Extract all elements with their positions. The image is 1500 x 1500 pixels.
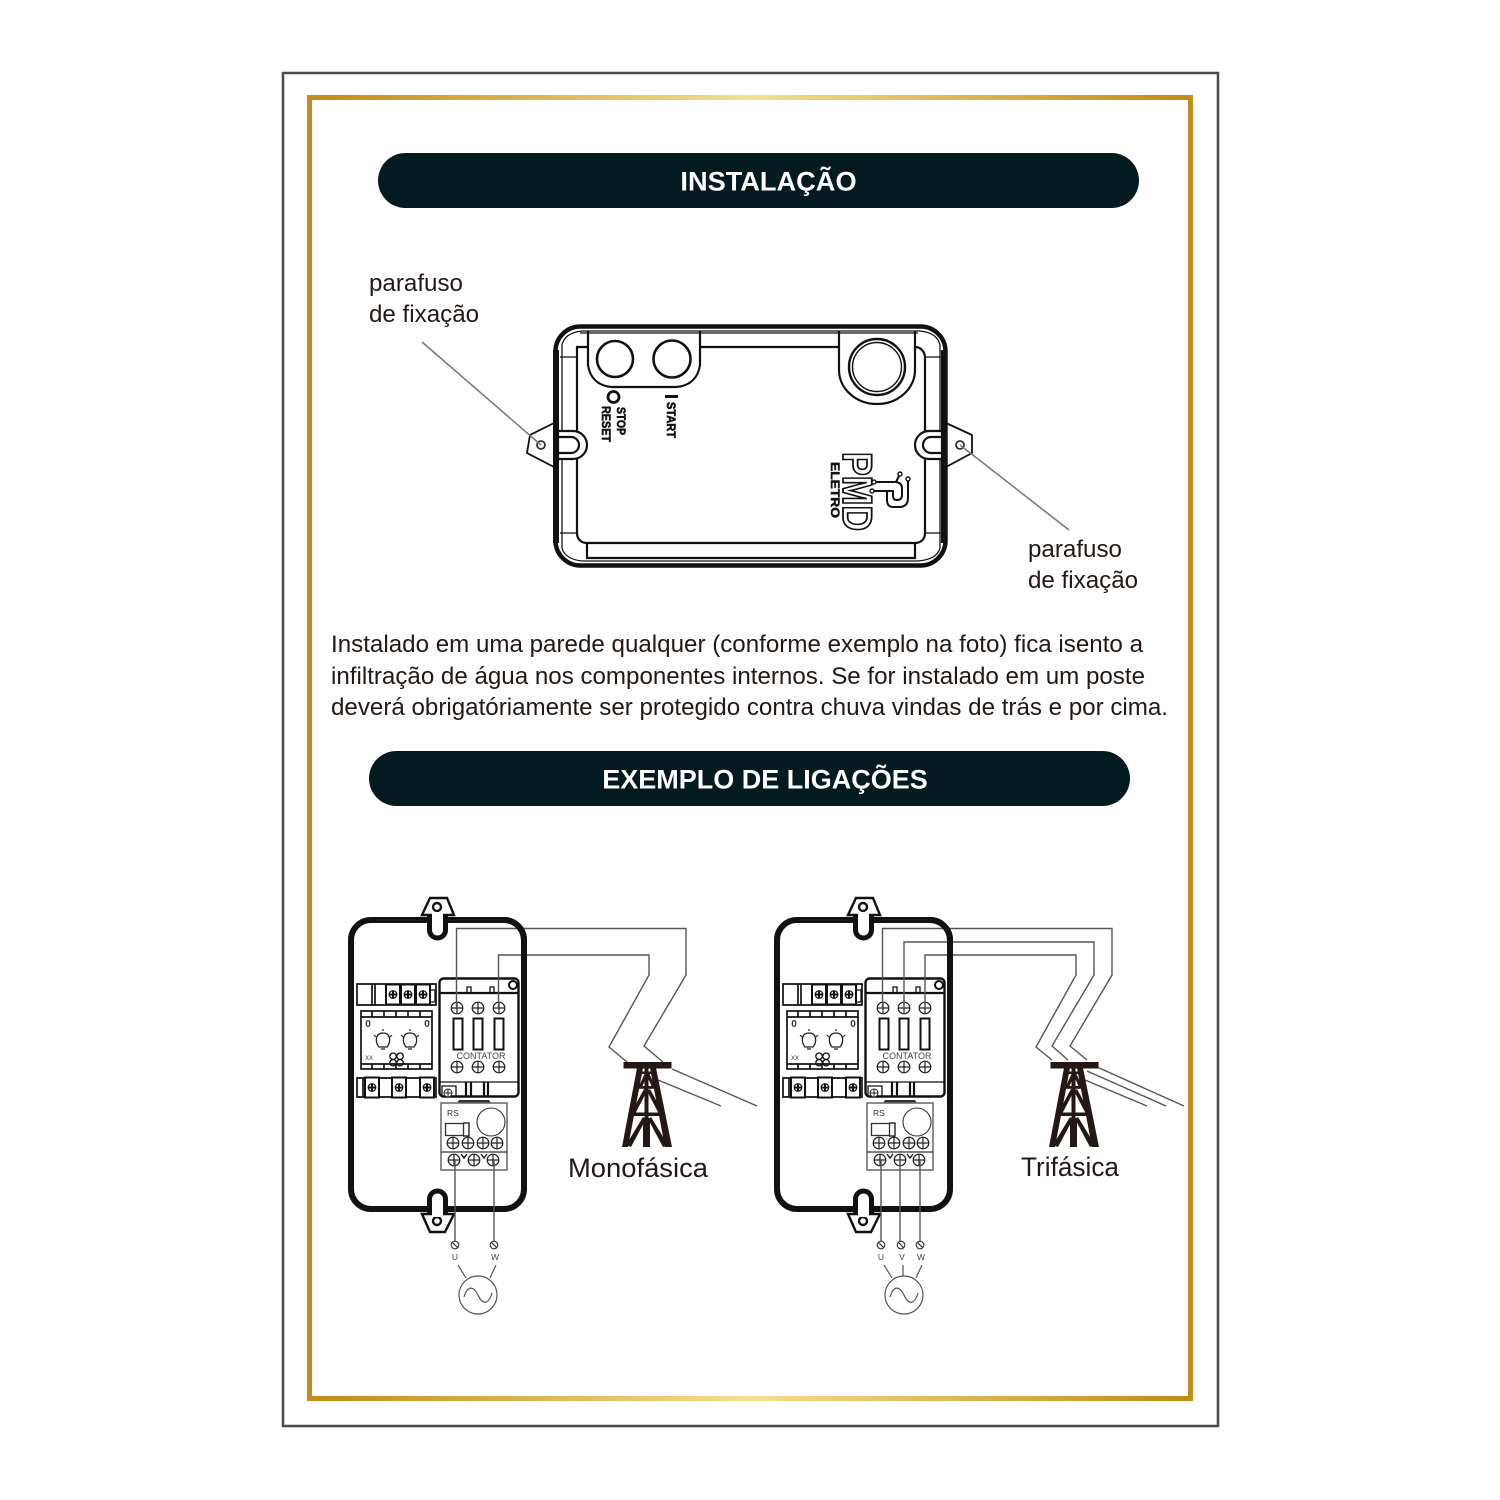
terminals and generator xyxy=(877,1241,925,1314)
leader line right xyxy=(960,445,1069,530)
device drawing: enclosure top view xyxy=(527,326,972,566)
logo pmd eletro: PMD xyxy=(834,452,881,531)
paragraph: deverá obrigatóriamente ser protegido contra chuva vindas de trás e por cima. xyxy=(331,694,1168,721)
start mark xyxy=(665,395,678,398)
mounting tab right xyxy=(946,423,972,467)
relay module: 0 xyxy=(791,1019,797,1030)
diagram: trifásica xyxy=(777,898,1184,1314)
relay module: XX xyxy=(791,1056,799,1062)
enclosure body xyxy=(553,326,947,566)
label: parafuso de fixação left: de fixação xyxy=(369,301,479,328)
tower xyxy=(1049,1062,1099,1147)
indicator led xyxy=(608,392,619,402)
mounting tab left xyxy=(527,423,554,467)
thermal relay xyxy=(441,1100,507,1170)
logo pmd eletro xyxy=(828,452,910,531)
terminals and generator: V xyxy=(899,1252,905,1262)
terminals and generator: W xyxy=(917,1252,925,1262)
heading: exemplo de ligações: EXEMPLO DE LIGAÇÕES xyxy=(602,764,928,794)
label: parafuso de fixação right: de fixação xyxy=(1028,567,1138,594)
fixing slot left xyxy=(558,431,587,459)
relay module xyxy=(783,984,862,1098)
text stop: STOP xyxy=(614,407,628,435)
logo pmd eletro: ELETRO xyxy=(828,462,842,518)
contactor: CONTATOR xyxy=(456,1051,506,1061)
label trifásica: Trifásica xyxy=(1021,1152,1120,1182)
relay module: 0 xyxy=(850,1019,856,1030)
button start xyxy=(654,340,690,378)
thermal relay: RS xyxy=(447,1108,459,1118)
cable gland xyxy=(839,331,915,404)
terminals and generator xyxy=(451,1241,499,1314)
terminals and generator: U xyxy=(878,1252,884,1262)
enclosure xyxy=(351,898,524,1232)
diagram: monofásica xyxy=(351,898,757,1314)
button housing xyxy=(588,331,700,387)
label monofásica: Monofásica xyxy=(568,1153,709,1183)
text reset: RESET xyxy=(599,406,613,443)
terminals and generator: U xyxy=(452,1252,458,1262)
tower xyxy=(622,1062,672,1147)
thermal relay: RS xyxy=(873,1108,885,1118)
relay module xyxy=(357,984,436,1098)
wires xyxy=(455,920,757,1241)
label: parafuso de fixação left: parafuso xyxy=(369,270,463,297)
relay module: 0 xyxy=(424,1019,430,1030)
heading: instalação xyxy=(378,153,1139,208)
paragraph: Instalado em uma parede qualquer (conforme exemplo na foto) fica isento a xyxy=(331,631,1144,658)
relay module: 0 xyxy=(365,1019,371,1030)
thermal relay xyxy=(867,1100,933,1170)
terminals and generator: W xyxy=(491,1252,499,1262)
heading: exemplo de ligações xyxy=(369,751,1130,806)
button stop xyxy=(597,341,633,377)
wires xyxy=(881,920,1184,1241)
heading: instalação: INSTALAÇÃO xyxy=(680,166,857,196)
paragraph: infiltração de água nos componentes internos. Se for instalado em um poste xyxy=(331,663,1145,690)
contactor xyxy=(440,978,518,1097)
label: parafuso de fixação right: parafuso xyxy=(1028,536,1122,563)
text start: START xyxy=(664,402,678,439)
gold inner frame xyxy=(307,95,1193,1401)
leader line left xyxy=(422,342,541,445)
contactor: CONTATOR xyxy=(882,1051,932,1061)
enclosure xyxy=(777,898,950,1232)
contactor xyxy=(866,978,944,1097)
relay module: XX xyxy=(365,1056,373,1062)
fixing slot right xyxy=(915,431,942,459)
outer page frame xyxy=(283,73,1218,1426)
